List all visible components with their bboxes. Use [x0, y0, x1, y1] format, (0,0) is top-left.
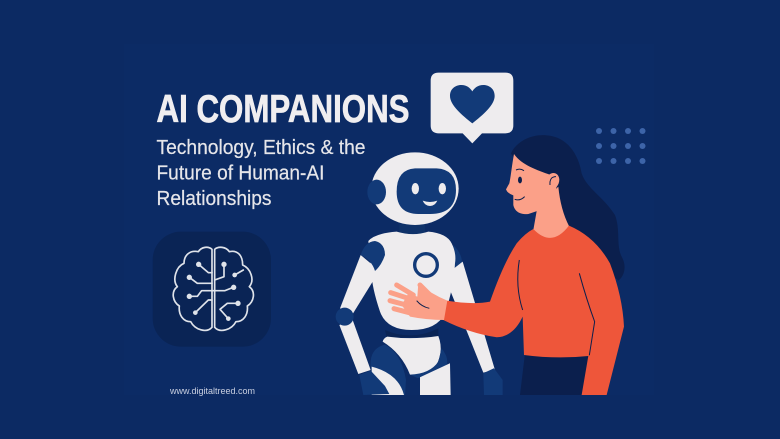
woman neck — [533, 187, 569, 238]
woman face — [506, 154, 557, 214]
woman sleeve folds — [518, 260, 523, 310]
robot thigh joint — [371, 345, 406, 395]
subtitle — [156, 136, 366, 210]
robot far shoulder and arm — [453, 245, 462, 268]
subtitle: Relationships — [156, 187, 272, 210]
robot head — [371, 152, 459, 225]
robot near hand — [359, 371, 389, 395]
subtitle: Future of Human-AI — [156, 162, 324, 184]
robot ear — [367, 180, 386, 204]
woman trousers — [520, 353, 595, 395]
woman sweater — [443, 226, 624, 395]
robot near arm — [340, 255, 377, 314]
woman hair — [511, 135, 625, 281]
decorative dot grid — [596, 128, 646, 164]
woman eye, brow and mouth — [518, 177, 522, 183]
robot near shoulder — [361, 241, 385, 271]
robot hip band — [410, 348, 447, 378]
woman's hand — [390, 283, 447, 320]
title: AI COMPANIONS — [156, 88, 410, 131]
subtitle: Technology, Ethics & the — [156, 136, 366, 159]
robot legs — [372, 367, 404, 395]
woman ear — [547, 173, 559, 189]
website url: www.digitaltreed.com — [169, 386, 255, 397]
icon: heart — [450, 85, 495, 123]
robot neck — [399, 223, 425, 235]
icon: brain circuit — [153, 232, 271, 347]
robot elbow — [336, 308, 354, 326]
robot waist — [385, 328, 438, 337]
woman — [443, 135, 625, 395]
robot torso — [368, 232, 455, 330]
speech bubble with heart — [431, 73, 513, 143]
robot face screen — [397, 168, 456, 214]
robot eyes and smile — [412, 183, 419, 194]
robot hips — [383, 336, 441, 375]
robot chest ring — [415, 254, 437, 276]
robot far hand — [483, 368, 503, 395]
robot — [336, 152, 503, 395]
